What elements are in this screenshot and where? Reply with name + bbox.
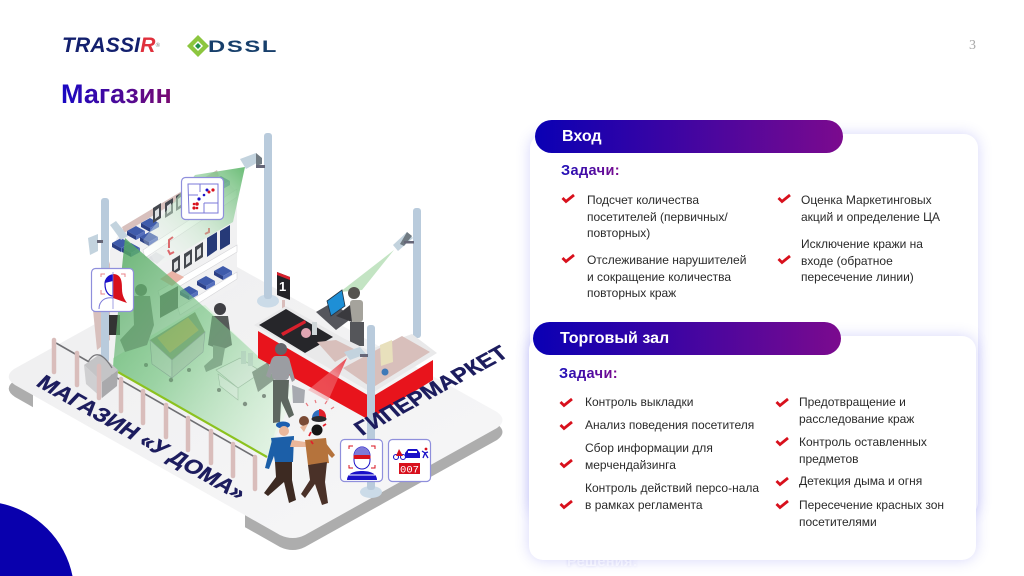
cone to cashier xyxy=(340,250,394,292)
label: ГИПЕРМАРКЕТ: ГИПЕРМАРКЕТ xyxy=(349,342,513,440)
icon card: face analytics xyxy=(92,268,134,312)
shelf unit xyxy=(93,170,237,360)
task: staff control xyxy=(585,481,760,512)
task: merchandising data xyxy=(585,441,713,472)
entrance task 2: Отслеживание нарушителей xyxy=(587,253,746,267)
checkout number sign xyxy=(277,272,290,310)
task: theft prevention: расследование краж xyxy=(799,412,914,426)
logo: TRASSIR: TRASSIR® xyxy=(62,34,160,57)
entrance task 1 xyxy=(587,193,728,240)
camera left pole B xyxy=(110,221,128,240)
task: abandoned items xyxy=(799,435,927,466)
task: abandoned items: предметов xyxy=(799,452,859,466)
task: staff control: в рамках регламента xyxy=(585,498,703,512)
focus corners on shelf xyxy=(168,228,209,254)
shelf middle row goods xyxy=(148,225,230,275)
task: theft prevention: Предотвращение и xyxy=(799,395,906,409)
panel heading: entrance: Вход xyxy=(562,128,602,145)
entrance task 4: входе (обратное xyxy=(801,254,893,268)
panel heading: entrance xyxy=(535,120,843,153)
check icon xyxy=(778,254,791,264)
hidden-looking label behind lower panel: Решения: xyxy=(567,554,638,570)
red camera beam xyxy=(308,358,347,401)
task: behaviour analysis: Анализ поведения посетителя xyxy=(585,418,754,432)
task: theft prevention xyxy=(799,395,914,426)
task: staff control: Контроль действий персо-нала xyxy=(585,481,759,495)
logo: DSSL xyxy=(187,35,278,57)
entrance task 3: акций и определение ЦА xyxy=(801,210,940,224)
check icon xyxy=(776,476,789,486)
task: display control: Контроль выкладки xyxy=(585,395,693,409)
check icon xyxy=(560,398,573,408)
check icon xyxy=(560,500,573,510)
camera centre pole xyxy=(240,153,265,169)
floor platform xyxy=(9,260,502,550)
sales floor tasks heading: Задачи: xyxy=(559,366,618,382)
camera left pole A xyxy=(88,234,103,255)
entrance tasks heading: Задачи: xyxy=(561,163,620,179)
task: merchandising data: мерчендайзинга xyxy=(585,458,676,472)
shopper xyxy=(109,284,178,352)
entrance task 2: повторных краж xyxy=(587,286,676,300)
second cart xyxy=(216,351,274,406)
camera cone from centre pole xyxy=(143,167,245,267)
basket xyxy=(84,354,118,398)
label: МАГАЗИН У ДОМА: МАГАЗИН «У ДОМА» xyxy=(32,371,252,504)
entrance task 1: посетителей (первичных/ xyxy=(587,210,728,224)
check icon xyxy=(560,420,573,430)
store illustration xyxy=(8,133,513,550)
shelf top row goods xyxy=(112,176,230,257)
check icon xyxy=(562,194,575,204)
task: merchandising data: Сбор информации для xyxy=(585,441,713,455)
suspect xyxy=(301,424,335,505)
panel heading: sales floor xyxy=(533,322,841,355)
page number: 3 xyxy=(969,38,976,53)
shopping cart with goods xyxy=(144,312,205,382)
entrance task 4: пересечение линии) xyxy=(801,270,914,284)
task: red zones: Пересечение красных зон xyxy=(799,498,944,512)
entrance task 4: Исключение кражи на xyxy=(801,237,923,251)
check icon xyxy=(776,398,789,408)
entrance task 3: Оценка Маркетинговых xyxy=(801,193,932,207)
icon card: floor plan heatmap xyxy=(182,178,224,220)
title: Магазин xyxy=(61,79,172,109)
checkout counter xyxy=(254,306,437,421)
icon card: vehicle counter xyxy=(388,440,430,482)
logo: DSSL: DSSL xyxy=(208,37,278,56)
panel heading: sales floor: Торговый зал xyxy=(560,330,669,347)
decorative blue circle bottom-left xyxy=(0,503,72,576)
entrance task 1: Подсчет количества xyxy=(587,193,699,207)
shopper with dark jacket xyxy=(204,303,232,372)
entrance task 4 xyxy=(801,237,923,284)
task: abandoned items: Контроль оставленных xyxy=(799,435,927,449)
icon card: suspect recognition xyxy=(340,440,382,482)
check icon xyxy=(776,500,789,510)
front pole xyxy=(360,325,382,498)
panel: sales floor xyxy=(529,336,976,560)
check icon xyxy=(778,194,791,204)
police officer xyxy=(264,422,312,503)
alarm and detected face xyxy=(299,400,334,432)
green boundary line xyxy=(118,372,267,457)
check icon xyxy=(776,436,789,446)
entrance task 1: повторных) xyxy=(587,226,650,240)
camera cone from left pole xyxy=(113,238,290,457)
shelf bottom row goods xyxy=(160,266,232,300)
entrance task 2 xyxy=(587,253,746,300)
green floor zone xyxy=(113,305,295,457)
check icon xyxy=(562,254,575,264)
task: red zones xyxy=(799,498,944,529)
poles xyxy=(101,133,421,363)
checkout number sign: 1 xyxy=(279,279,286,294)
camera front pole xyxy=(344,347,368,360)
entrance task 3 xyxy=(801,193,940,224)
camera right pole xyxy=(393,232,414,251)
cashier xyxy=(316,287,364,346)
fence xyxy=(54,340,255,489)
entrance task 2: и сокращение количества xyxy=(587,270,731,284)
guard xyxy=(266,343,305,423)
panel: entrance xyxy=(530,134,978,516)
check icon xyxy=(560,458,573,468)
icon card: vehicle counter: 007 xyxy=(400,466,419,476)
task: red zones: посетителями xyxy=(799,515,877,529)
task: smoke and fire: Детекция дыма и огня xyxy=(799,474,922,488)
